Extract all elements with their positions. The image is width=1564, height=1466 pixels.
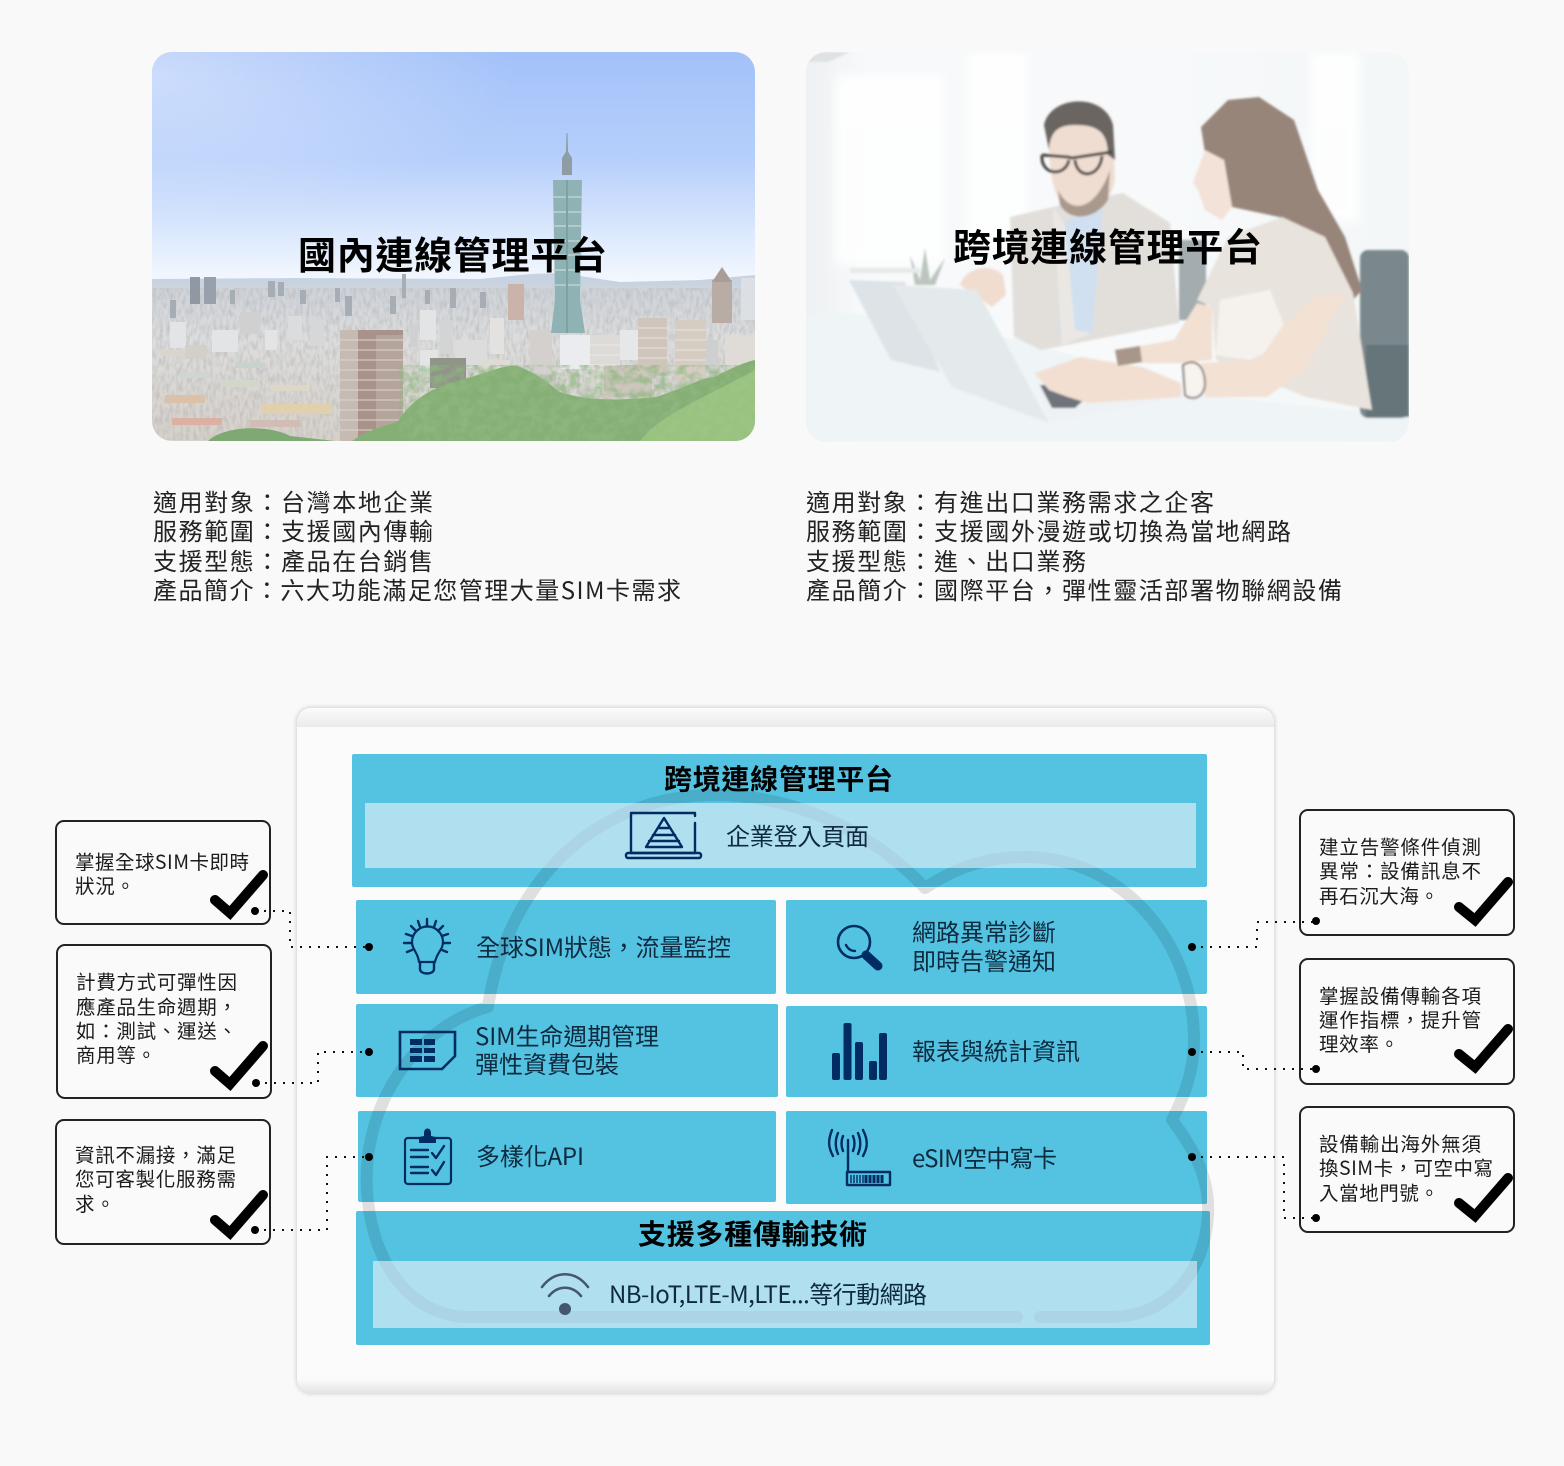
connector: services callout to block bbox=[251, 1153, 373, 1234]
text block: domestic platform details: 產品簡介：六大功能滿足您管理大量SIM卡需求 bbox=[153, 571, 681, 606]
text block: cross-border platform details: 產品簡介：國際平台，彈性靈活部署物聯網設備 bbox=[806, 571, 1342, 606]
text: global SIM status: 全球SIM狀態，流量監控 bbox=[476, 928, 731, 963]
callout: transmission metrics bbox=[1300, 959, 1514, 1084]
callout: custom services bbox=[56, 1120, 270, 1244]
text: SIM lifecycle bbox=[475, 1017, 659, 1080]
block: SIM lifecycle bbox=[356, 1004, 778, 1097]
photo panel: office team bbox=[806, 52, 1409, 442]
icon: antenna router bbox=[829, 1130, 890, 1185]
panel: platform architecture bbox=[296, 707, 1275, 1394]
callout: transmission metrics: 運作指標，提升管 bbox=[1319, 1004, 1481, 1033]
callout: global SIM status: 狀況。 bbox=[75, 870, 135, 899]
block: global SIM monitoring bbox=[356, 900, 776, 994]
block: reports bbox=[786, 1006, 1207, 1097]
text: network diagnosis bbox=[912, 913, 1056, 977]
connector: billing callout to block bbox=[252, 1048, 373, 1087]
callout: flexible billing: 應產品生命週期， bbox=[76, 991, 237, 1020]
text block: domestic platform details: 適用對象：台灣本地企業 bbox=[153, 483, 433, 518]
heading: domestic platform: 國內連線管理平台 bbox=[298, 225, 607, 280]
callout: alert rules: 再石沉大海。 bbox=[1319, 880, 1439, 909]
block: network diagnosis bbox=[786, 900, 1207, 994]
inner band: mobile networks bbox=[373, 1261, 1197, 1328]
block: API bbox=[358, 1111, 776, 1202]
icon: SIM card bbox=[400, 1032, 455, 1069]
icon: bar chart bbox=[832, 1023, 887, 1080]
inner band: login page bbox=[365, 803, 1196, 868]
text block: domestic platform details bbox=[153, 483, 681, 606]
callout: overseas eSIM: 換SIM卡，可空中寫 bbox=[1319, 1152, 1493, 1181]
callout: flexible billing: 計費方式可彈性因 bbox=[76, 966, 237, 995]
text: eSIM: eSIM空中寫卡 bbox=[912, 1139, 1057, 1174]
callout: flexible billing: 商用等。 bbox=[76, 1039, 156, 1068]
callout: custom services: 求。 bbox=[75, 1188, 115, 1217]
callout: overseas eSIM bbox=[1300, 1107, 1514, 1232]
text block: cross-border platform details bbox=[806, 483, 1342, 606]
callout: transmission metrics: 掌握設備傳輸各項 bbox=[1319, 980, 1481, 1009]
text block: domestic platform details: 服務範圍：支援國內傳輸 bbox=[153, 512, 433, 547]
text: SIM lifecycle: 彈性資費包裝 bbox=[475, 1045, 619, 1080]
text: network diagnosis: 即時告警通知 bbox=[912, 942, 1056, 977]
callout: alert rules bbox=[1300, 810, 1514, 935]
callout: overseas eSIM: 入當地門號。 bbox=[1319, 1177, 1439, 1206]
photo panel: Taipei skyline bbox=[152, 52, 755, 442]
plant bbox=[910, 248, 945, 285]
text block: cross-border platform details: 適用對象：有進出口業務需求之企客 bbox=[806, 483, 1214, 518]
callout: alert rules: 異常：設備訊息不 bbox=[1319, 855, 1481, 884]
heading: platform title: 跨境連線管理平台 bbox=[664, 758, 893, 798]
watermark: cloud outline bbox=[367, 795, 1208, 1317]
callout: global SIM status bbox=[56, 821, 270, 924]
connector: diagnosis block to callout bbox=[1188, 917, 1320, 951]
callout: custom services: 資訊不漏接，滿足 bbox=[75, 1139, 236, 1168]
callout: alert rules: 建立告警條件偵測 bbox=[1319, 831, 1481, 860]
text block: domestic platform details: 支援型態：產品在台銷售 bbox=[153, 542, 433, 577]
connector: reports block to callout bbox=[1188, 1048, 1320, 1073]
icon: laptop with pyramid bbox=[626, 813, 701, 858]
Taipei 101 tower bbox=[551, 133, 585, 333]
text block: cross-border platform details: 支援型態：進、出口業務 bbox=[806, 542, 1086, 577]
text: login page: 企業登入頁面 bbox=[726, 817, 869, 852]
text: reports: 報表與統計資訊 bbox=[912, 1032, 1080, 1067]
callout: flexible billing bbox=[57, 945, 271, 1098]
icon: light bulb bbox=[404, 919, 450, 974]
callout: global SIM status: 掌握全球SIM卡即時 bbox=[75, 846, 249, 875]
text: network diagnosis: 網路異常診斷 bbox=[912, 913, 1056, 948]
callout: flexible billing: 如：測試、運送、 bbox=[76, 1015, 237, 1044]
callout: transmission metrics: 理效率。 bbox=[1319, 1028, 1399, 1057]
block: top platform band bbox=[352, 754, 1207, 887]
heading: cross-border platform: 跨境連線管理平台 bbox=[953, 217, 1262, 272]
callout: custom services: 您可客製化服務需 bbox=[75, 1163, 236, 1192]
icon: magnifier bbox=[838, 926, 878, 966]
connector: global SIM callout to block bbox=[251, 907, 373, 951]
text: SIM lifecycle: SIM生命週期管理 bbox=[475, 1017, 659, 1052]
text: mobile networks: NB-IoT,LTE-M,LTE...等行動網路 bbox=[609, 1275, 927, 1310]
text block: cross-border platform details: 服務範圍：支援國外漫遊或切換為當地網路 bbox=[806, 512, 1291, 547]
block: transport technologies bbox=[356, 1211, 1210, 1345]
block: eSIM bbox=[786, 1111, 1207, 1204]
icon: wifi bbox=[542, 1274, 588, 1315]
connector: eSIM block to callout bbox=[1188, 1153, 1320, 1222]
text: API: 多樣化API bbox=[476, 1137, 584, 1172]
icon: clipboard checklist bbox=[405, 1128, 451, 1184]
heading: transport technologies: 支援多種傳輸技術 bbox=[638, 1213, 867, 1253]
callout: overseas eSIM: 設備輸出海外無須 bbox=[1319, 1128, 1481, 1157]
